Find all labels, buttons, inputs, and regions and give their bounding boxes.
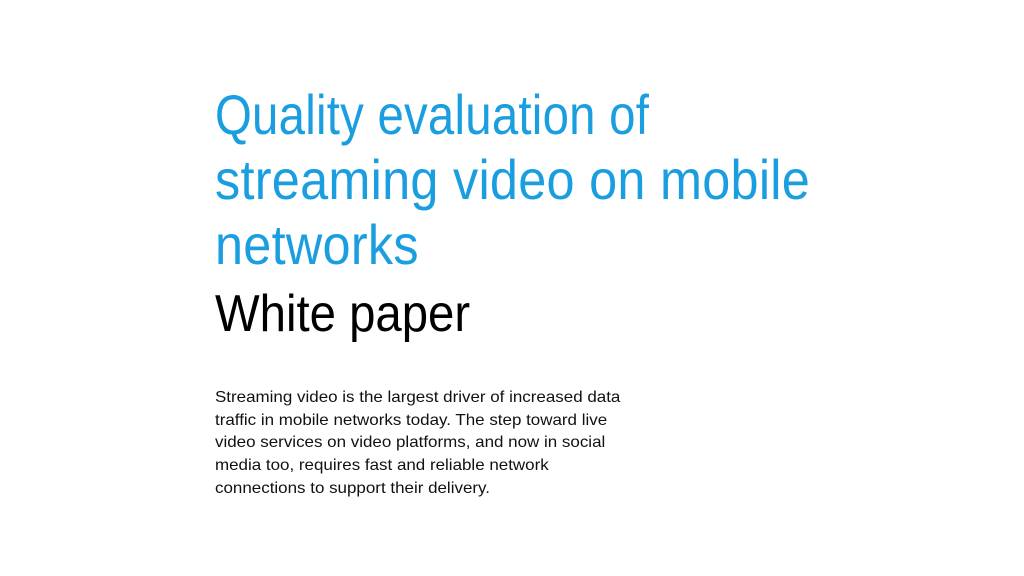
body text: Streaming video is the largest driver of increased data <box>215 389 620 406</box>
title <box>215 83 810 276</box>
body text: video services on video platforms, and now in social <box>215 434 605 451</box>
body text: connections to support their delivery. <box>215 480 490 497</box>
body text <box>215 389 620 497</box>
title: Quality evaluation of <box>215 83 649 146</box>
body text: traffic in mobile networks today. The step toward live <box>215 412 607 429</box>
title: networks <box>215 213 419 276</box>
subtitle: White paper <box>215 285 470 343</box>
body text: media too, requires fast and reliable network <box>215 457 549 474</box>
title: streaming video on mobile <box>215 148 810 211</box>
